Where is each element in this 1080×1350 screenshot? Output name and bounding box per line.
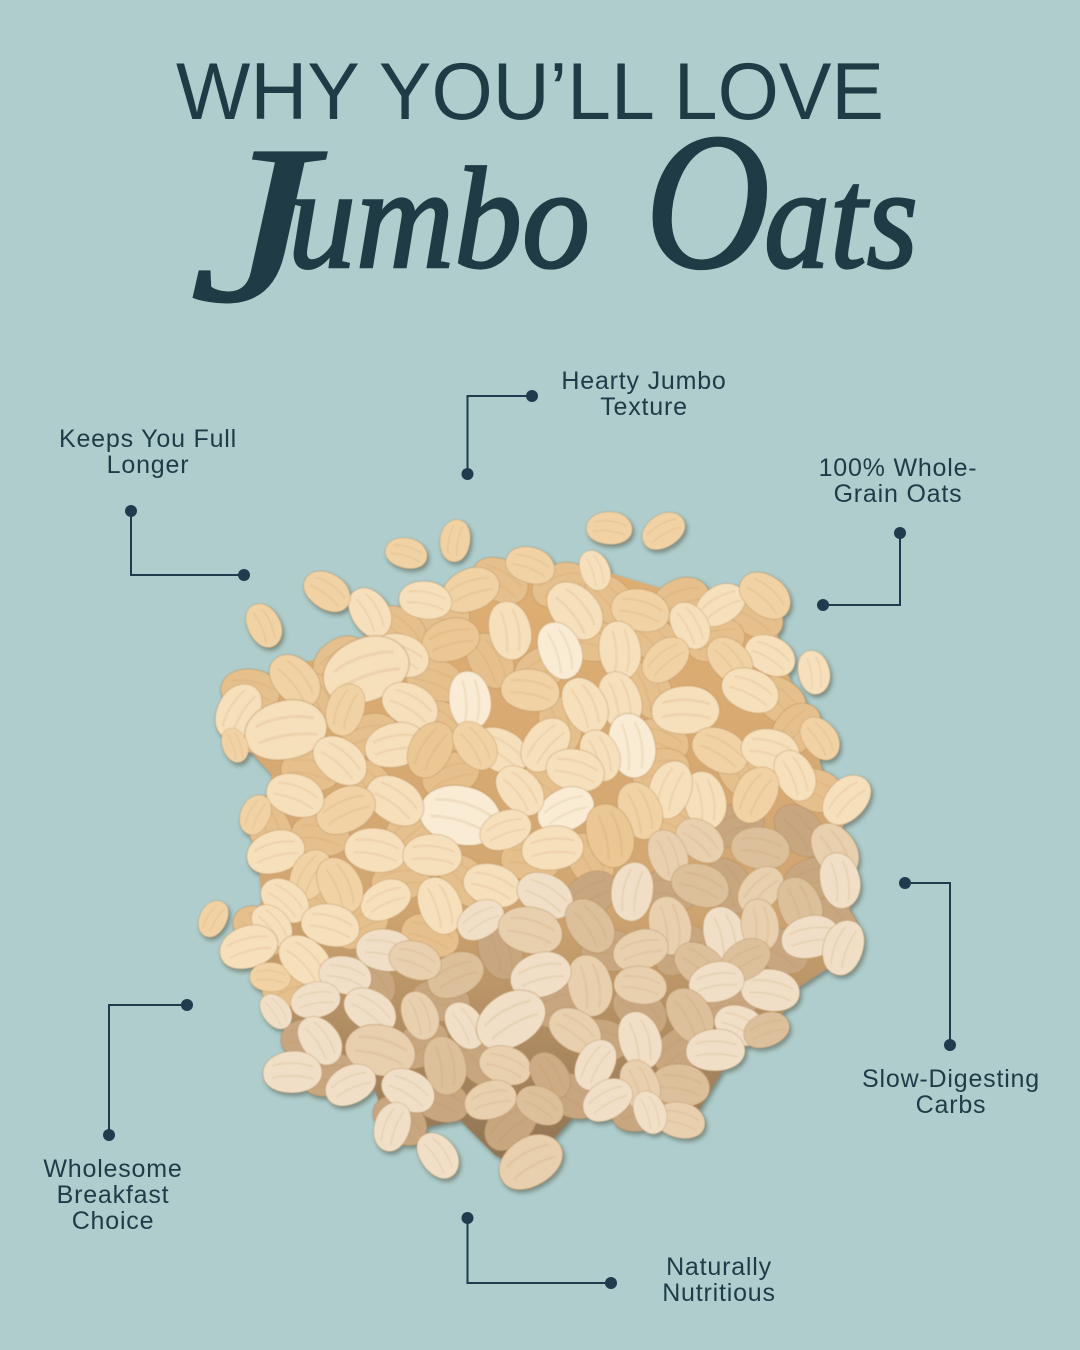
under-layer flakes [214,547,868,1160]
callout: slow-digesting carbs: Carbs [916,1091,986,1119]
callout: keeps you full longer: Keeps You Full [59,425,237,453]
heading: why you'll love: WHY YOU’LL LOVE [176,47,884,137]
heading: jumbo oats script: umbo [288,139,590,299]
callout: wholesome breakfast choice: Breakfast [57,1181,169,1209]
callout: wholesome breakfast choice [43,999,193,1235]
lower flakes [215,809,872,1200]
upper flakes [205,540,880,907]
loose flakes [192,505,833,1035]
callout: keeps you full longer: Longer [107,451,189,479]
callout: 100% whole-grain oats: Grain Oats [834,480,962,508]
callout: wholesome breakfast choice: Wholesome [43,1155,183,1183]
callout: 100% whole-grain oats [817,454,977,611]
heading: jumbo oats script: ats [764,139,918,299]
callout: slow-digesting carbs: Slow-Digesting [862,1065,1040,1093]
callout: naturally nutritious: Nutritious [662,1279,776,1307]
title [176,47,918,349]
callout: slow-digesting carbs [862,877,1040,1119]
callout: wholesome breakfast choice: Choice [72,1207,154,1235]
callout: hearty jumbo texture: Texture [600,393,688,421]
pile base shadow [235,560,850,1170]
callout: hearty jumbo texture: Hearty Jumbo [561,367,727,395]
oat pile [192,505,880,1200]
callout: keeps you full longer [59,425,250,581]
heading: jumbo oats script [190,94,918,349]
callout: hearty jumbo texture [462,367,727,480]
callout: 100% whole-grain oats: 100% Whole- [819,454,977,482]
callout: naturally nutritious [462,1212,776,1307]
heading: jumbo oats script: J [190,99,326,349]
callout: naturally nutritious: Naturally [666,1253,772,1281]
heading: jumbo oats script: O [645,94,770,310]
